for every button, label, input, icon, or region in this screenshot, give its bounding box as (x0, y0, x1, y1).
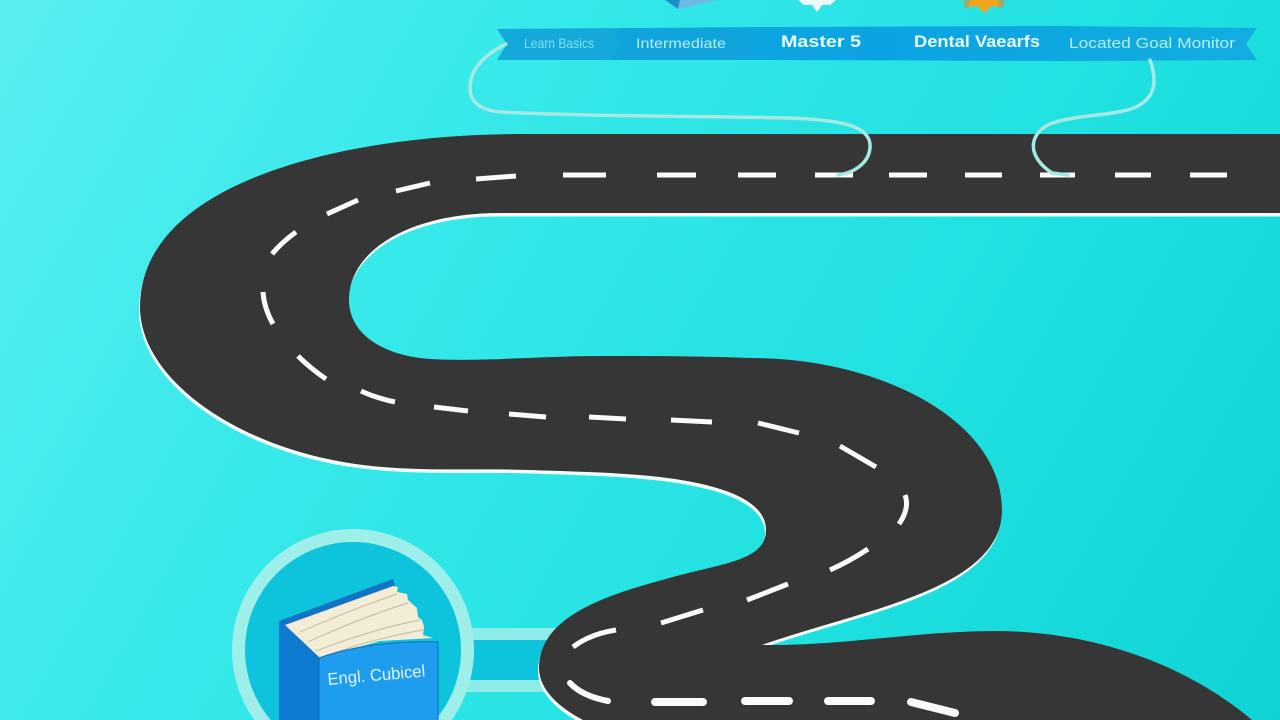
chevron: step 2 (620, 29, 758, 60)
s-bend dashes (573, 495, 907, 647)
bottom curve dash (570, 683, 608, 701)
icon: blue book fragment (665, 0, 718, 9)
first curve dashes (263, 176, 876, 467)
book title: Engl. Cubicel (327, 662, 426, 689)
icon: white snowflake fragment (798, 0, 836, 12)
bottom thick dashes (570, 683, 955, 713)
badge disc (245, 542, 461, 720)
icon: orange star fragment (963, 0, 1005, 13)
lane dashes (263, 175, 1227, 647)
top icons (665, 0, 1005, 13)
ribbon body (497, 26, 1257, 61)
label: step 1: Learn Basics (524, 35, 594, 51)
book pages (285, 586, 433, 658)
connector: banner to road left (470, 44, 870, 175)
label: step 5: Located Goal Monitor (1069, 35, 1235, 52)
book back cover (279, 579, 396, 660)
label: step 4: Dental Vaearfs (914, 32, 1040, 51)
icon: book (279, 579, 438, 720)
banner ribbon (497, 26, 1257, 61)
road edge highlight (139, 213, 1280, 720)
page lines (300, 594, 423, 656)
badge ring (232, 529, 474, 720)
connector: banner to road right (1033, 60, 1154, 175)
label: step 2: Intermediate (636, 35, 726, 51)
connector band core (470, 640, 547, 680)
icon group: book badge (232, 529, 560, 720)
road (139, 134, 1280, 720)
connector band (466, 628, 556, 692)
book spine (279, 621, 319, 720)
bottom straight dashes (655, 701, 955, 713)
book front cover (319, 642, 438, 720)
top straight dashes (563, 172, 1227, 178)
label: step 3: Master 5 (781, 32, 861, 51)
road surface (140, 134, 1280, 720)
chevron: step 1 (497, 29, 506, 60)
